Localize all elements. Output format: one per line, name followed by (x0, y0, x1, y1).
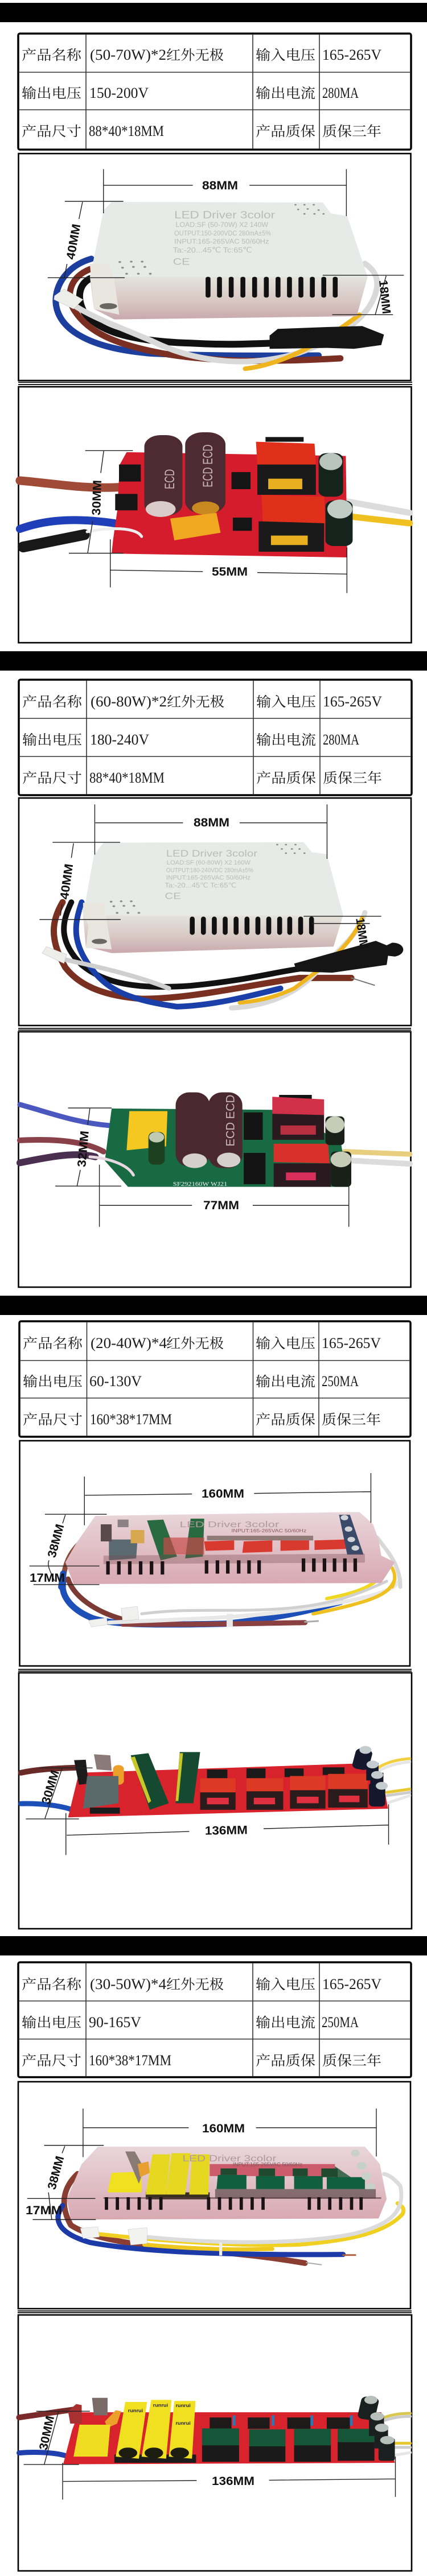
dimension 88MM: 88MM (194, 816, 229, 829)
spec table 3: 产品尺寸 (23, 1412, 83, 1428)
spec table 2: (60-80W)*2 (91, 693, 167, 710)
dimension 17MM: 17MM (30, 1572, 65, 1585)
spec table 2: 输出电压 (22, 733, 82, 748)
spec table 3: 红外无极 (166, 1336, 224, 1351)
dimension 77MM: 77MM (203, 1199, 239, 1212)
spec table 2: 165-265V (323, 693, 382, 710)
capacitor markings: runrui (176, 2421, 191, 2426)
spec table 3: 250MA (322, 1373, 359, 1390)
spec table 2: 产品质保 (256, 771, 316, 786)
spec table 4: 产品质保 (256, 2053, 315, 2069)
spec table 4: 产品尺寸 (22, 2053, 81, 2069)
spec table 2: 输入电压 (256, 694, 316, 710)
case print: INPUT:165-265VAC 50/60Hz (233, 2162, 302, 2168)
plug (270, 326, 384, 349)
dimension 160MM: 160MM (202, 1487, 244, 1500)
spec table 4: (30-50W)*4 (90, 1976, 166, 1992)
spec table 1: 产品尺寸 (22, 124, 81, 139)
spec table 1: 88*40*18MM (89, 123, 164, 139)
spec table 1: 红外无极 (166, 48, 224, 63)
spec table 3: 输出电压 (23, 1374, 83, 1390)
case print: OUTPUT:180-240VDC 280mA±5% (166, 867, 253, 874)
spec table 2: 180-240V (90, 731, 149, 748)
spec table 2: 280MA (323, 731, 359, 748)
spec table 4: 90-165V (89, 2014, 141, 2031)
panel: translucent driver 160x38x17 second model (18, 2082, 410, 2309)
spec table 4: 输入电压 (256, 1977, 315, 1992)
capacitor markings: runrui (128, 2408, 143, 2414)
dimension 38MM: 38MM (46, 2155, 67, 2191)
panel: red circuit board 55x30 (18, 387, 411, 643)
case print: Ta:-20...45℃ Tc:65℃ (173, 246, 252, 254)
dimension 136MM: 136MM (205, 1824, 248, 1838)
header band 4 (0, 1936, 427, 1955)
spec table 2: 输出电流 (256, 733, 316, 748)
spec table 4: 250MA (322, 2014, 359, 2031)
spec table 1: 150-200V (89, 85, 149, 101)
case print: LOAD:SF (60-80W) X2 160W (167, 859, 251, 866)
spec table 1: 产品名称 (22, 48, 82, 63)
case print (165, 848, 257, 902)
dimension 38MM: 38MM (46, 1523, 67, 1559)
dimension 40MM: 40MM (64, 223, 83, 261)
spec table 4: 质保三年 (322, 2053, 381, 2069)
spec table 2 (19, 680, 412, 795)
spec table 3: 产品质保 (256, 1412, 315, 1428)
dimension 88MM: 88MM (202, 179, 238, 192)
spec table 3: 输出电流 (256, 1374, 315, 1390)
panel: enclosed driver 88x40x18 (18, 154, 411, 381)
panel: red long circuit board with yellow capacitors 136x30 (18, 2263, 412, 2571)
spec table 3: 60-130V (89, 1373, 142, 1390)
case print: CE (173, 257, 190, 267)
case print: LED Driver 3color (180, 1520, 279, 1529)
panel: translucent driver 160x38x17 (19, 1441, 410, 1666)
spec table 1: 输出电流 (256, 86, 315, 101)
case print (182, 2153, 302, 2168)
capacitor markings (128, 2403, 191, 2426)
spec table 2: 红外无极 (167, 694, 224, 710)
spec table 4: 红外无极 (166, 1977, 224, 1992)
case print: Ta:-20...45℃ Tc:65℃ (165, 882, 236, 890)
case print: INPUT:165-265VAC 50/60Hz (166, 874, 251, 881)
case print: CE (165, 892, 181, 902)
spec table 1: 输出电压 (22, 86, 81, 101)
case print: INPUT:165-265VAC 50/60Hz (174, 238, 269, 246)
dimension 136MM: 136MM (212, 2475, 254, 2488)
spec table 1: 165-265V (322, 47, 381, 63)
spec table 3: 输入电压 (256, 1336, 315, 1351)
capacitor markings: ECD (162, 469, 178, 489)
dimension 32MM: 32MM (75, 1130, 92, 1168)
spec table 1: (50-70W)*2 (90, 47, 166, 63)
spec table 4: 165-265V (322, 1976, 381, 1992)
capacitor markings: ECD (200, 444, 216, 465)
dimension 30MM: 30MM (39, 1769, 62, 1806)
case print (180, 1520, 306, 1533)
capacitor markings: runrui (176, 2403, 191, 2409)
spec table 1: 280MA (322, 85, 359, 101)
header band 3 (0, 1296, 427, 1315)
capacitor markings: runrui (153, 2403, 168, 2408)
capacitor marking: ECD ECD (224, 1095, 237, 1146)
spec table 3: (20-40W)*4 (91, 1335, 167, 1351)
header band 1 (0, 3, 427, 22)
board silk: SF292160W WJ21 (173, 1181, 227, 1188)
dimension 18MM: 18MM (353, 917, 371, 950)
panel: enclosed driver 88x40x18 second model (19, 798, 411, 1026)
case print: LOAD:SF (50-70W) X2 140W (176, 221, 268, 229)
capacitor markings: ECD (200, 467, 216, 487)
capacitor markings (162, 444, 216, 489)
spec table 4: 160*38*17MM (89, 2052, 171, 2069)
spec table 1: 质保三年 (322, 124, 381, 139)
dimension 40MM: 40MM (58, 863, 76, 900)
case print: LED Driver 3color (166, 848, 257, 859)
spec table 1: 产品质保 (256, 124, 315, 139)
spec table 3: 165-265V (322, 1335, 381, 1351)
spec table 4: 输出电压 (22, 2015, 81, 2031)
panel: green circuit board 77x32 (18, 1032, 411, 1287)
case print: LED Driver 3color (182, 2153, 277, 2163)
spec table 4 (18, 1962, 411, 2077)
spec table 2: 质保三年 (323, 771, 382, 786)
dimension 160MM: 160MM (202, 2122, 245, 2135)
dimension 55MM: 55MM (212, 565, 248, 578)
header band 2 (0, 651, 427, 671)
panel: red long circuit board 136x30 (19, 1673, 412, 1929)
spec table 3 (19, 1321, 410, 1437)
spec table 2: 88*40*18MM (89, 770, 165, 786)
spec table 2: 产品名称 (22, 694, 83, 710)
dimension 30MM: 30MM (90, 480, 104, 515)
case print: LED Driver 3color (174, 209, 276, 221)
dimension 17MM: 17MM (26, 2204, 62, 2217)
case print: OUTPUT:150-200VDC 280mA±5% (174, 230, 271, 237)
spec table 3: 质保三年 (322, 1412, 381, 1428)
spec table 2: 产品尺寸 (22, 771, 82, 786)
case print (173, 209, 276, 267)
dimension 18MM: 18MM (376, 279, 393, 315)
spec table 3: 产品名称 (23, 1336, 83, 1351)
spec table 4: 产品名称 (22, 1977, 82, 1992)
dimension 30MM: 30MM (37, 2414, 57, 2451)
spec table 1: 输入电压 (256, 48, 315, 63)
case print: INPUT:165-265VAC 50/60Hz (232, 1528, 306, 1533)
spec table 4: 输出电流 (256, 2015, 315, 2031)
spec table 1 (18, 34, 411, 150)
spec table 3: 160*38*17MM (90, 1411, 172, 1428)
